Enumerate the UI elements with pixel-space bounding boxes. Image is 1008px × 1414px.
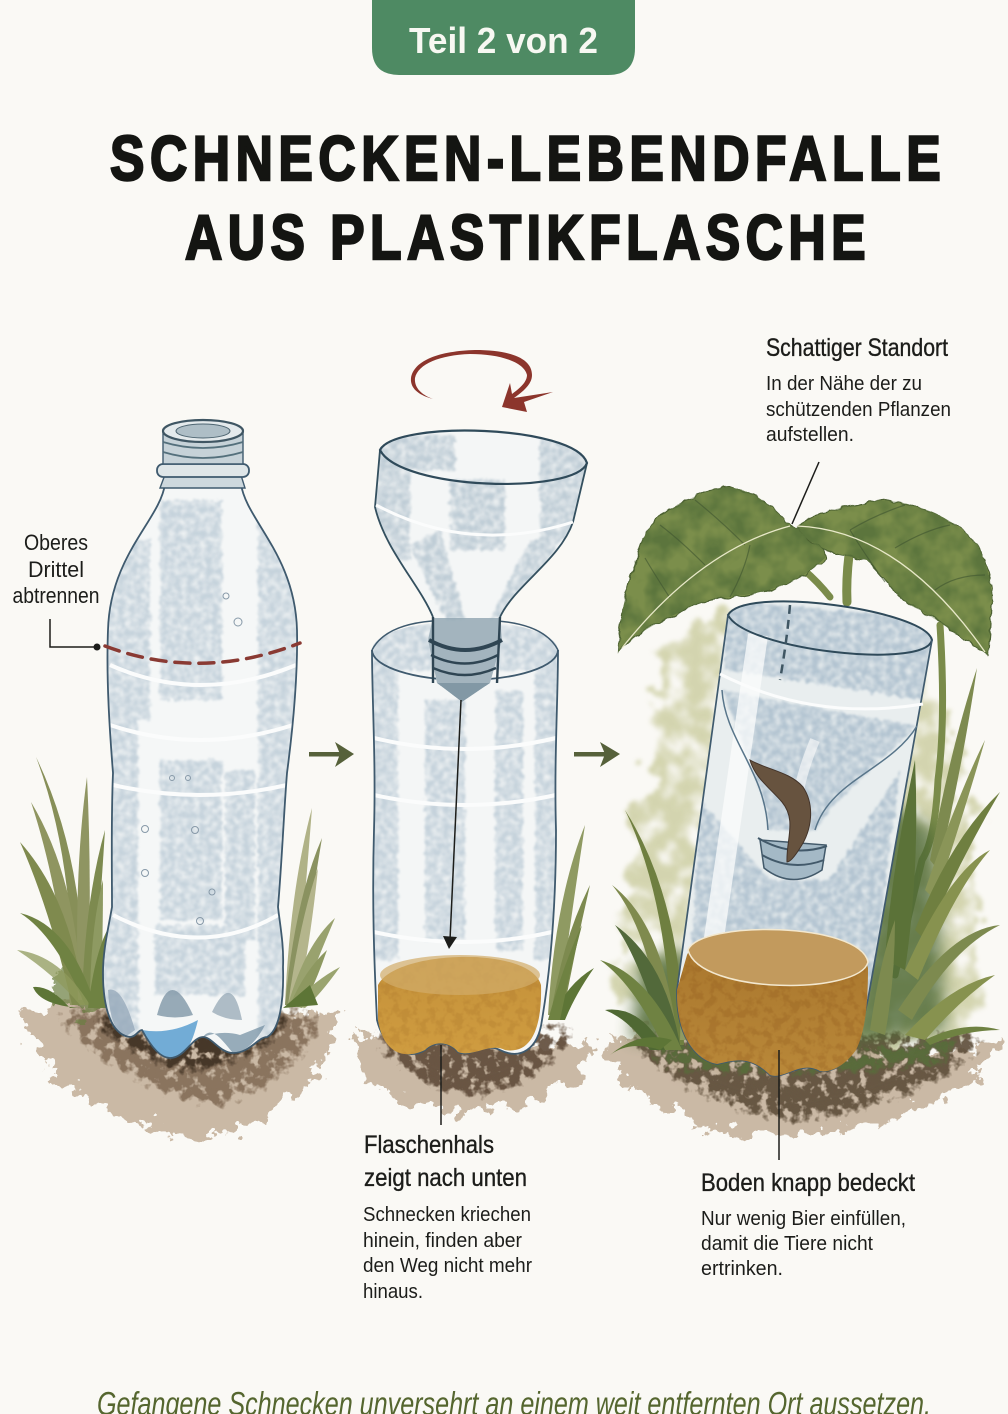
label: Oberes Drittel abtrennen: Drittel — [28, 557, 84, 582]
illustration: finished trap with plant — [600, 480, 1000, 1135]
bottle 1 — [103, 420, 298, 1070]
label: Schattiger Standort: aufstellen. — [766, 424, 854, 446]
green wash background — [622, 613, 985, 1065]
bottle ridges — [110, 665, 296, 938]
grass right of bottle — [283, 808, 340, 1008]
title: SCHNECKEN-LEBENDFALLE — [110, 124, 941, 194]
label: Flaschenhals zeigt nach unten: hinein, finden aber — [363, 1230, 522, 1252]
label: Flaschenhals zeigt nach unten: den Weg nicht mehr — [363, 1255, 532, 1277]
funnel outline — [375, 450, 587, 617]
left leaf — [618, 485, 828, 654]
bottle feet shading — [142, 1020, 198, 1058]
label: Schattiger Standort — [766, 334, 951, 524]
label: Oberes Drittel abtrennen: abtrennen — [12, 583, 100, 608]
beer in cylinder — [378, 955, 541, 1054]
label: Flaschenhals zeigt nach unten: zeigt nach unten — [364, 1164, 527, 1192]
label: Boden knapp bedeckt: damit die Tiere nicht — [701, 1233, 873, 1255]
arrow: rotate bottle top — [411, 350, 553, 412]
dark foliage mass — [630, 800, 945, 1045]
glass reflections — [104, 480, 298, 1070]
badge: Teil 2 von 2: Teil 2 von 2 — [409, 20, 598, 61]
title — [110, 124, 941, 273]
label: Schattiger Standort: In der Nähe der zu — [766, 373, 922, 395]
arrow: step 1 to 2 — [309, 742, 354, 767]
soil mound 1 — [25, 996, 335, 1136]
soil mound 3 — [605, 1028, 1000, 1135]
trap inner funnel — [720, 674, 923, 880]
label: Boden knapp bedeckt: Nur wenig Bier einfüllen, — [701, 1208, 906, 1230]
grass right of cylinder — [548, 825, 594, 1020]
trap beer — [677, 929, 868, 1076]
pointer arrow — [443, 700, 461, 949]
droplets — [142, 593, 242, 924]
funnel top — [375, 430, 590, 702]
cut line — [105, 643, 300, 663]
lower cylinder — [372, 620, 559, 1054]
grass right of trap — [870, 668, 1000, 1045]
bottle outline — [103, 484, 297, 1058]
badge: Teil 2 von 2 — [372, 0, 635, 75]
plant stems — [804, 555, 943, 975]
label: Oberes Drittel abtrennen: Oberes — [24, 530, 88, 555]
label: Flaschenhals zeigt nach unten: Schnecken kriechen — [363, 1204, 531, 1226]
trap bottle — [677, 600, 940, 1076]
bottle body — [103, 484, 297, 1058]
label: Flaschenhals zeigt nach unten: hinaus. — [363, 1281, 423, 1303]
soil mound 2 — [350, 1023, 595, 1110]
grass left of trap — [600, 810, 695, 1055]
illustration: intact bottle on soil — [17, 420, 340, 1136]
bottle neck and cap rings — [160, 472, 245, 488]
grass left of bottle — [17, 757, 110, 1010]
arrow: step 2 to 3 — [574, 742, 620, 767]
label: Schattiger Standort: Schattiger Standort — [766, 334, 948, 362]
label: Schattiger Standort: schützenden Pflanzen — [766, 399, 951, 421]
label: Boden knapp bedeckt: Boden knapp bedeckt — [701, 1169, 915, 1197]
right leaf — [796, 498, 994, 657]
label: Flaschenhals zeigt nach unten — [363, 1045, 532, 1303]
title: AUS PLASTIKFLASCHE — [185, 203, 866, 273]
label: Boden knapp bedeckt — [701, 1050, 915, 1280]
slug — [750, 760, 811, 862]
label: Flaschenhals zeigt nach unten: Flaschenhals — [364, 1131, 494, 1159]
illustration: assembled funnel bottle — [350, 350, 595, 1110]
label: Boden knapp bedeckt: ertrinken. — [701, 1258, 783, 1280]
funnel neck rings — [429, 617, 502, 683]
label: Oberes Drittel abtrennen — [12, 530, 100, 650]
